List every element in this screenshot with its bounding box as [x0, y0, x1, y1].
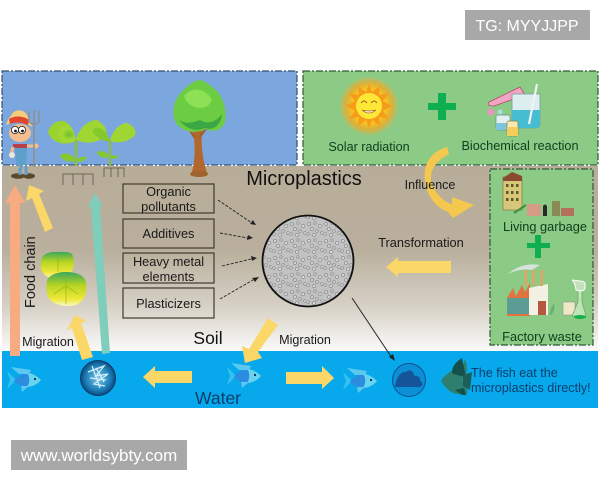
- icon: fish middle: [227, 363, 261, 388]
- icon: farmer: [6, 110, 39, 179]
- icon: plus right: [527, 235, 550, 258]
- watermark: telegram: TG: MYYJJPP: [475, 18, 579, 35]
- icon: fish with plastics: [392, 364, 426, 396]
- label: water: Water: [195, 388, 241, 408]
- arrow: water left: [143, 366, 192, 388]
- box: plasticizers: [123, 288, 214, 318]
- box: additives: Additives: [143, 226, 194, 241]
- box: organic pollutants: Organic: [146, 184, 192, 199]
- watermark: website: [11, 440, 187, 470]
- box: plasticizers: Plasticizers: [136, 296, 201, 311]
- label: soil: Soil: [193, 328, 223, 348]
- icon: seedling left: [48, 120, 107, 166]
- label: fish eat microplastics: [471, 366, 591, 395]
- icon: angelfish: [441, 358, 472, 395]
- arrow: yellow to farmer: [26, 185, 53, 232]
- icon: cabbage: [41, 252, 87, 306]
- arrow: to eaten fish: [352, 298, 395, 361]
- arrow: transformation: [386, 257, 451, 277]
- icon: plastic ball: [80, 360, 116, 396]
- box: organic pollutants: [123, 184, 214, 214]
- box: organic pollutants: pollutants: [141, 199, 196, 214]
- icon: roots: [63, 168, 124, 185]
- watermark: website: www.worldsybty.com: [20, 446, 177, 465]
- arrow: influence curve: [425, 147, 474, 218]
- box: heavy metal elements: [123, 253, 214, 284]
- label: migration right: Migration: [279, 333, 331, 347]
- heading: microplastics: Microplastics: [246, 168, 362, 190]
- label: biochemical reaction: Biochemical reaction: [461, 139, 579, 153]
- label: fish eat microplastics: The fish eat the: [471, 366, 558, 380]
- icon: microplastics circle: [262, 216, 354, 306]
- arrows: inputs to microplastics: [218, 200, 259, 299]
- panel: waste sources: [490, 169, 593, 345]
- icon: factory: [507, 264, 586, 319]
- icon: seedling right: [92, 123, 136, 166]
- icon: living garbage buildings: [503, 172, 574, 216]
- box: additives: [123, 219, 214, 248]
- arrow: yellow migration left: [67, 315, 93, 360]
- label: solar radiation: Solar radiation: [328, 140, 410, 154]
- label: factory waste: Factory waste: [502, 329, 582, 344]
- icon: plus top: [428, 93, 456, 120]
- icon: fish right: [343, 368, 377, 393]
- arrow: food chain orange: [5, 185, 25, 356]
- arrow: teal to plant: [88, 193, 110, 354]
- icon: fish left: [7, 367, 41, 392]
- panel: environmental factors: [303, 71, 598, 165]
- label: migration left: Migration: [22, 335, 74, 349]
- icon: tree: [173, 80, 226, 177]
- panel: soil: [2, 166, 598, 352]
- arrow: yellow migration to fish: [242, 318, 278, 363]
- label: transformation: Transformation: [378, 235, 464, 250]
- label: influence: Influence: [405, 178, 455, 192]
- watermark: telegram: [465, 10, 590, 40]
- icon: lab glassware: [488, 84, 540, 136]
- box: heavy metal elements: elements: [143, 269, 194, 284]
- panel: sky: [2, 71, 297, 165]
- box: heavy metal elements: Heavy metal: [133, 254, 204, 269]
- label: fish eat microplastics: microplastics directly!: [471, 381, 591, 395]
- icon: sun: [339, 76, 399, 136]
- label: food chain: Food chain: [23, 236, 39, 308]
- arrow: water right: [286, 366, 334, 389]
- label: living garbage: Living garbage: [503, 219, 587, 234]
- panel: water: [2, 351, 598, 408]
